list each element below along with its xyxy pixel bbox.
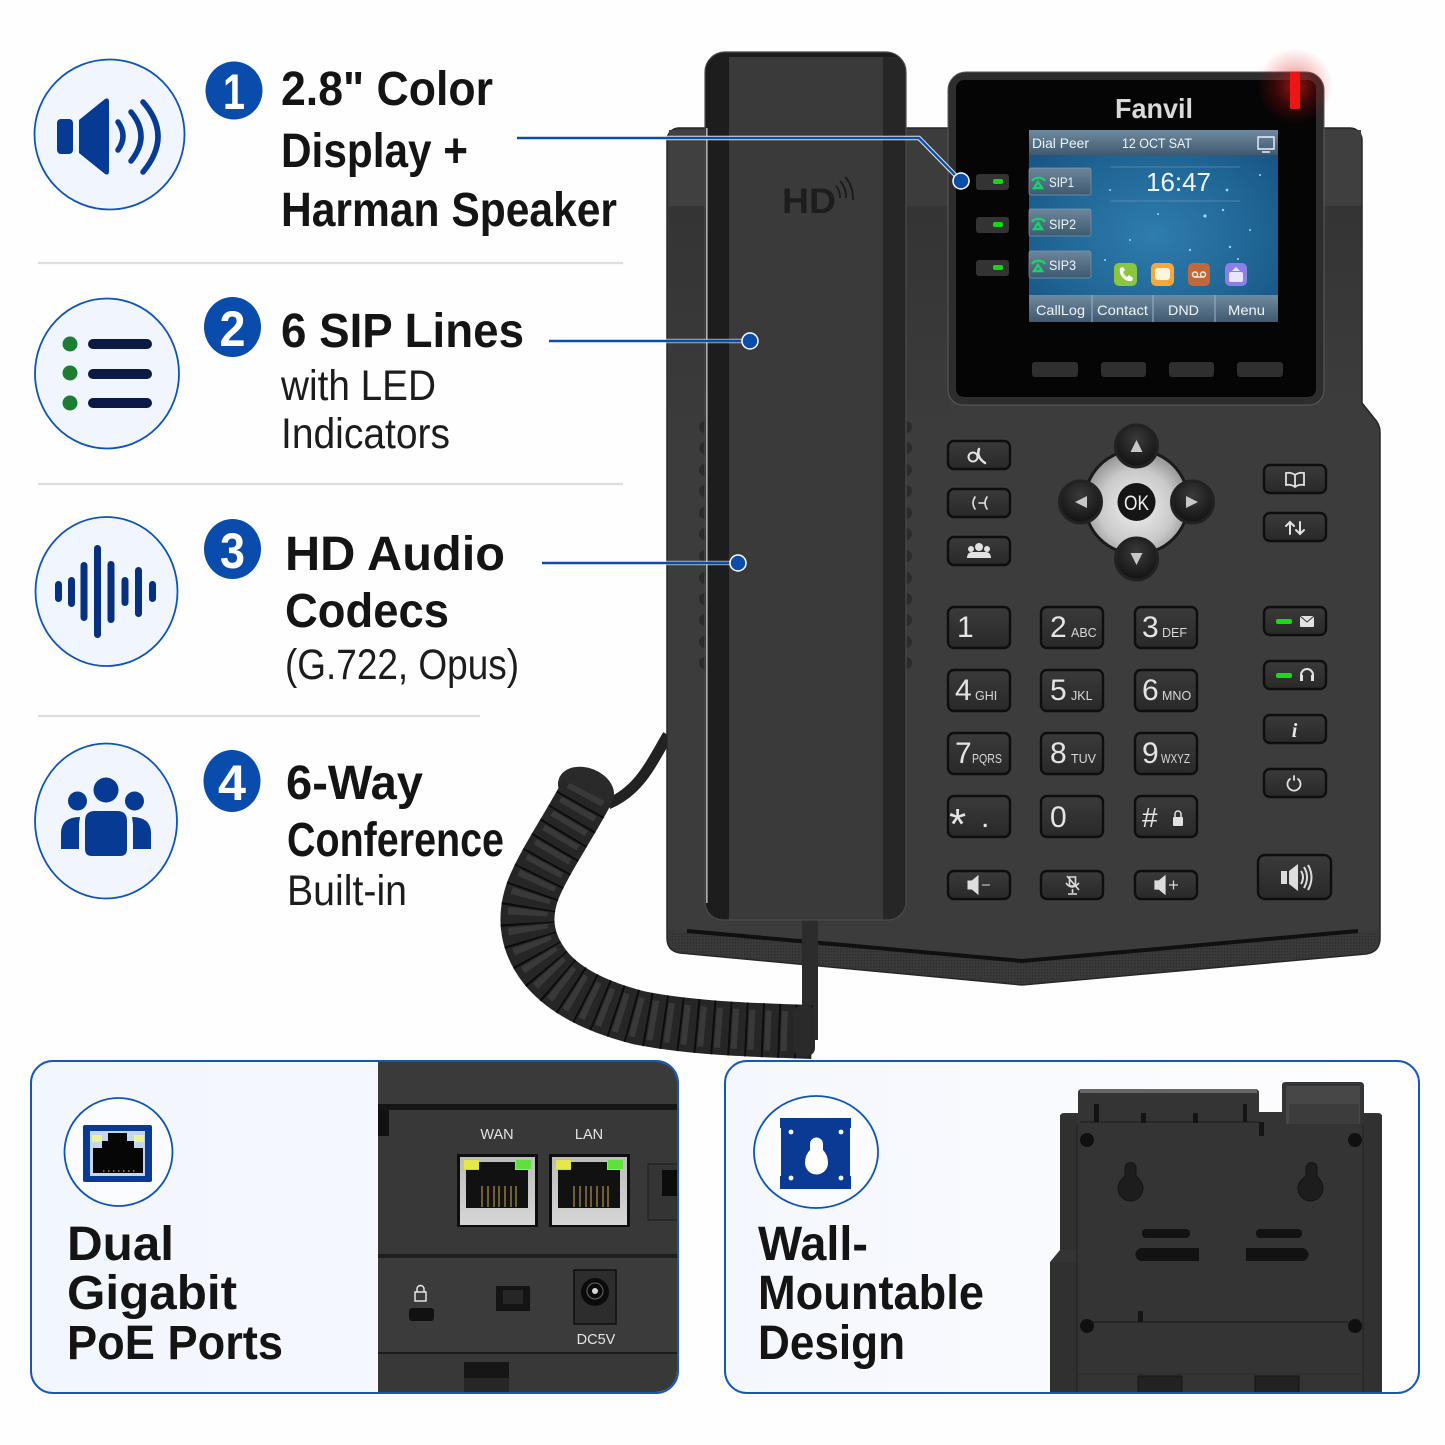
number badge 2 <box>204 297 261 357</box>
heading 1: Display + <box>281 125 468 178</box>
panel heading: Dual <box>67 1218 174 1271</box>
LAN port <box>549 1154 630 1227</box>
HD logo: HD <box>782 182 836 221</box>
dial pad: * <box>949 800 966 849</box>
HD logo <box>782 177 853 221</box>
dial pad: ABC <box>1071 626 1097 640</box>
number badge 4 <box>204 750 260 812</box>
icon: wall plate with keyhole <box>754 1096 878 1208</box>
panel heading <box>67 1218 283 1370</box>
bottom notch <box>464 1362 509 1393</box>
heading 4 <box>286 757 504 867</box>
dial pad: 3 <box>1142 611 1159 644</box>
top clips <box>1094 1104 1264 1136</box>
number badge 2: 2 <box>220 301 246 357</box>
display bezel <box>948 48 1333 405</box>
callout 1 leader line <box>517 138 969 189</box>
Fanvil logo: Fanvil <box>1115 93 1193 124</box>
dial pad: 1 <box>957 611 974 644</box>
dial pad: . <box>981 801 989 834</box>
port label LAN: LAN <box>575 1127 603 1143</box>
description 2 <box>280 362 450 458</box>
app icons <box>1114 263 1247 286</box>
line keys <box>976 174 1009 276</box>
icon: list with LEDs <box>35 298 179 448</box>
security lock slot <box>409 1286 434 1321</box>
SIP line labels: SIP1 <box>1049 174 1074 190</box>
number badge 1 <box>206 62 262 120</box>
SIP line labels: SIP3 <box>1049 257 1076 273</box>
port label DC5V: DC5V <box>577 1332 616 1348</box>
mounting slots <box>1136 1229 1308 1261</box>
heading 1: Harman Speaker <box>281 184 617 237</box>
dial pad: 6 <box>1142 674 1159 707</box>
feature 3: HD audio <box>36 517 519 689</box>
phone base <box>667 128 1380 985</box>
soft key labels: CallLog <box>1036 302 1085 318</box>
feature 1: display and speaker <box>34 60 617 237</box>
heading 4: Conference <box>287 814 504 867</box>
soft keys <box>1032 362 1283 377</box>
bottom latches <box>1138 1376 1299 1394</box>
panel heading: Design <box>758 1317 905 1370</box>
clock: 16:47 <box>1146 167 1211 197</box>
icon: RJ45 port <box>64 1098 172 1206</box>
photo: phone rear <box>1050 1082 1382 1394</box>
dial pad: 4 <box>955 674 972 707</box>
callout 2 leader line <box>549 333 758 349</box>
description 3: (G.722, Opus) <box>285 641 519 689</box>
callout 3 leader line <box>542 555 746 571</box>
icon: waveform <box>36 517 178 666</box>
SIP line labels <box>1029 168 1091 278</box>
heading 4: 6-Way <box>286 757 423 810</box>
handset <box>705 52 906 920</box>
icon: speaker <box>34 60 184 210</box>
soft key labels: Menu <box>1228 302 1265 318</box>
coiled handset cord <box>527 759 815 1056</box>
corner screw holes <box>1080 1133 1362 1333</box>
left function keys <box>948 441 1010 565</box>
WAN port <box>457 1154 538 1227</box>
heading 3: HD Audio <box>285 528 505 581</box>
status bar: 12 OCT SAT <box>1122 135 1192 151</box>
description 2: with LED <box>280 362 436 410</box>
bottom keys: volume, mute, speaker <box>948 855 1331 899</box>
heading 1: 2.8" Color <box>281 63 493 116</box>
heading 1 <box>281 63 617 237</box>
navigation cluster <box>1060 425 1214 580</box>
handset jack <box>496 1286 530 1311</box>
dial pad: 0 <box>1050 801 1067 834</box>
icon: people group <box>35 744 177 898</box>
SIP line labels: SIP2 <box>1049 216 1076 232</box>
dial pad: 9 <box>1142 737 1159 770</box>
feature 4: conference <box>35 744 504 915</box>
LCD screen <box>1029 130 1278 322</box>
heading 3 <box>285 528 505 638</box>
right function keys: i <box>1292 720 1298 742</box>
starfield <box>1104 174 1261 261</box>
number badge 1: 1 <box>223 64 245 120</box>
number badge 4: 4 <box>218 755 246 811</box>
dial pad: PQRS <box>972 752 1002 766</box>
illustration: desk phone <box>527 48 1380 1056</box>
soft key labels: Contact <box>1097 302 1148 318</box>
dial pad: JKL <box>1071 689 1093 703</box>
red status LED <box>1257 48 1333 124</box>
panel heading: Gigabit <box>67 1267 237 1320</box>
photo: rear ports <box>378 1062 678 1393</box>
panel heading: Wall- <box>758 1218 868 1271</box>
dial pad: 8 <box>1050 737 1067 770</box>
dial pad: TUV <box>1071 752 1097 766</box>
dial pad <box>948 607 1197 849</box>
dial pad: 7 <box>955 737 972 770</box>
soft key labels <box>1029 295 1278 322</box>
keyhole mounts <box>1118 1162 1323 1201</box>
dial pad: MNO <box>1162 689 1191 703</box>
dial pad: DEF <box>1162 626 1187 640</box>
earpiece grille bumps <box>699 421 912 669</box>
status bar: Dial Peer <box>1032 135 1089 151</box>
dial pad: 5 <box>1050 674 1067 707</box>
heading 3: Codecs <box>285 585 449 638</box>
panel heading: PoE Ports <box>67 1317 283 1370</box>
right function keys <box>1264 465 1326 797</box>
wire behind the phone <box>608 735 668 804</box>
description 2: Indicators <box>281 410 450 458</box>
panel heading: Mountable <box>758 1267 984 1320</box>
description 4: Built-in <box>287 867 407 915</box>
status bar <box>1029 130 1278 155</box>
feature 2: SIP lines <box>35 297 524 458</box>
DC power jack <box>574 1270 616 1324</box>
heading 2: 6 SIP Lines <box>281 305 524 358</box>
number badge 3: 3 <box>220 523 245 579</box>
soft key labels: DND <box>1168 302 1199 318</box>
port label WAN: WAN <box>480 1127 514 1143</box>
dial pad: WXYZ <box>1161 752 1190 766</box>
dial pad: # <box>1142 802 1158 833</box>
dial pad: GHI <box>975 689 997 703</box>
navigation cluster: OK <box>1124 492 1149 515</box>
panel: dual gigabit PoE ports <box>31 1061 678 1393</box>
panel heading <box>758 1218 984 1370</box>
dial pad: 2 <box>1050 611 1067 644</box>
number badge 3 <box>204 519 261 579</box>
side notch <box>648 1164 678 1220</box>
panel: wall-mountable design <box>725 1061 1419 1394</box>
